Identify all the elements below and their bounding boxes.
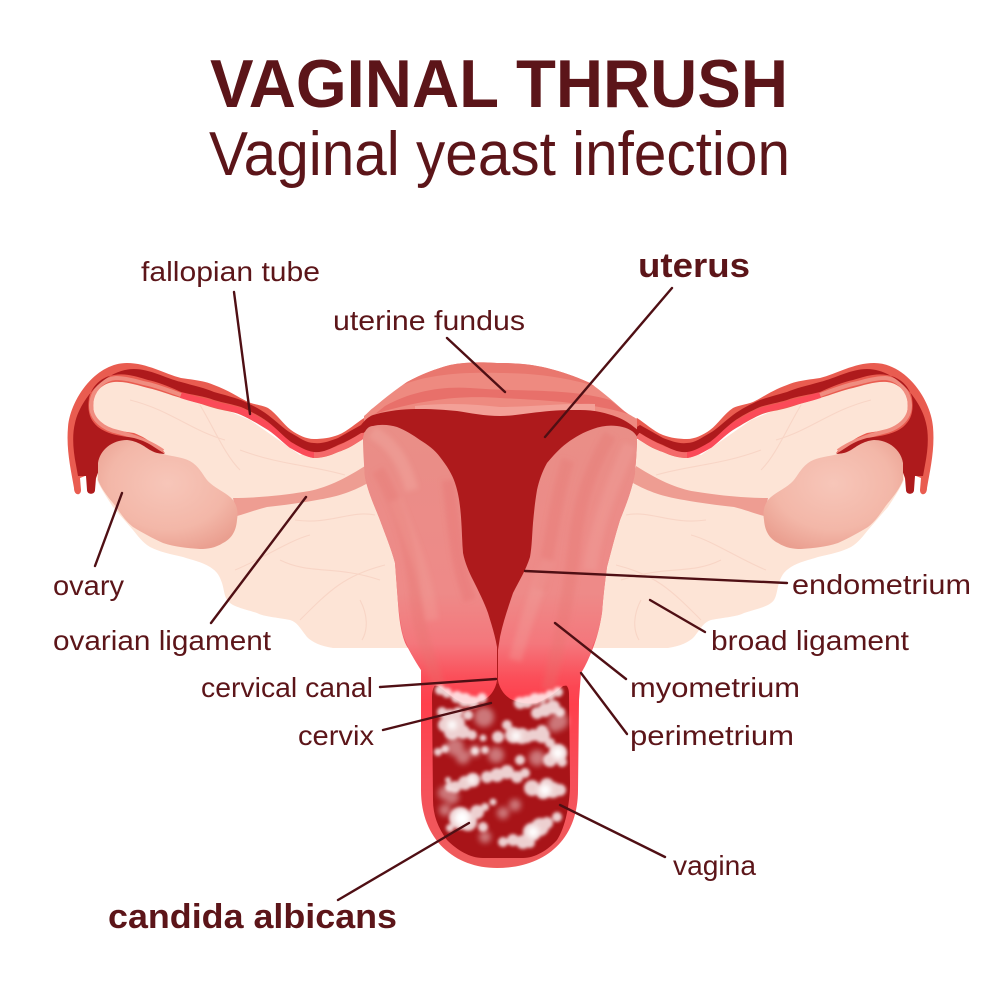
outer uterus and vagina wall (perimetrium) bbox=[363, 437, 637, 868]
right tube, ligament and ovary bbox=[591, 363, 933, 648]
bright colony highlights bbox=[447, 720, 564, 838]
label: ovary: ovary bbox=[53, 570, 124, 601]
label: cervix: cervix bbox=[298, 720, 374, 751]
label: uterus: uterus bbox=[638, 247, 750, 285]
title: VAGINAL THRUSH bbox=[210, 46, 788, 122]
anatomy: uterus, tubes, ovaries, vagina bbox=[68, 355, 933, 868]
infographic canvas bbox=[54, 60, 970, 928]
label: ovary bbox=[53, 493, 124, 601]
label: myometrium bbox=[555, 623, 800, 703]
vagina interior bbox=[432, 684, 570, 858]
label: fallopian tube bbox=[141, 256, 320, 414]
label: uterine fundus: uterine fundus bbox=[333, 305, 525, 336]
muscle streaks bbox=[372, 432, 630, 690]
label: perimetrium bbox=[581, 673, 794, 751]
label: broad ligament bbox=[650, 600, 909, 656]
label: cervical canal bbox=[201, 672, 496, 703]
candida albicans colonies, faint bbox=[438, 707, 568, 843]
label: cervical canal: cervical canal bbox=[201, 672, 373, 703]
candida albicans colonies, bright bbox=[434, 685, 567, 849]
label: candida albicans: candida albicans bbox=[108, 898, 397, 936]
label: ovarian ligament: ovarian ligament bbox=[53, 625, 271, 656]
label: ovarian ligament bbox=[53, 497, 306, 656]
label: perimetrium: perimetrium bbox=[630, 720, 794, 751]
label: myometrium: myometrium bbox=[630, 672, 800, 703]
label: candida albicans bbox=[108, 823, 469, 936]
label: broad ligament: broad ligament bbox=[711, 625, 909, 656]
label: vagina: vagina bbox=[673, 850, 756, 881]
label: uterine fundus bbox=[333, 305, 525, 392]
uterine fundus dome bbox=[364, 362, 637, 436]
label: uterus bbox=[545, 247, 750, 437]
left tube, ligament and ovary bbox=[68, 363, 410, 648]
subtitle: Vaginal yeast infection bbox=[209, 120, 790, 189]
label: endometrium bbox=[525, 569, 971, 600]
label: endometrium: endometrium bbox=[792, 569, 971, 600]
label: vagina bbox=[560, 805, 756, 881]
myometrium lobes bbox=[363, 425, 637, 704]
label: fallopian tube: fallopian tube bbox=[141, 256, 320, 287]
uterine cavity bbox=[361, 409, 640, 705]
label: cervix bbox=[298, 703, 491, 751]
